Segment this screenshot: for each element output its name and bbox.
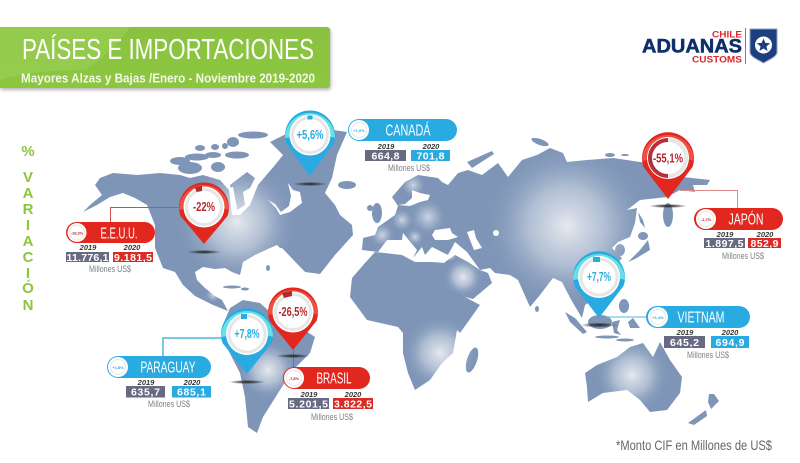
side label: % variación: N (23, 297, 33, 314)
pin: EE.UU. -22%: -22% (193, 200, 215, 214)
panel: Vietnam: VIETNAM (678, 310, 724, 326)
icon: shield (750, 29, 777, 63)
pin shadows (187, 182, 687, 384)
panel: Brasil: Millones US$ (311, 412, 353, 422)
pin: Vietnam +7,7%: +7,7% (587, 270, 611, 284)
panel: E.E.U.U.: -18,3% (71, 230, 84, 236)
panel: E.E.U.U.: E.E.U.U. (100, 226, 138, 242)
panel: Japón (694, 208, 783, 261)
panel: Vietnam: 2020 (721, 328, 739, 337)
panel: Canadá: 2020 (422, 142, 440, 151)
panel: Japón: 2019 (716, 230, 734, 239)
panel: E.E.U.U.: 2020 (123, 243, 141, 252)
pin: Brasil -26,5%: -26,5% (278, 305, 308, 319)
panel: Paraguay: 685,1 (177, 386, 206, 398)
connector lines (110, 190, 738, 367)
panel: Canadá (348, 119, 457, 173)
panel: Brasil: -7,8% (289, 376, 300, 381)
panel: Paraguay: 2020 (183, 378, 201, 387)
pin: Brasil -26,5% (268, 287, 318, 350)
pin: Paraguay +7,8% (221, 308, 273, 374)
panel: Paraguay (107, 356, 211, 409)
panel: Brasil: BRASIL (316, 370, 352, 388)
header banner (0, 27, 331, 90)
side label: % variación: R (23, 201, 34, 218)
panel: Brasil: 2020 (344, 390, 362, 399)
panel: Paraguay: +1,8% (112, 365, 124, 370)
panel: Japón: 2020 (756, 230, 774, 239)
panel: Brasil (283, 367, 373, 422)
panel: E.E.U.U.: Millones US$ (89, 264, 131, 274)
panel: Brasil: 3.822,5 (334, 398, 372, 410)
side label: % variación: % (21, 143, 35, 160)
logo: Aduanas Chile: CUSTOMS (692, 54, 742, 66)
panel: Vietnam: +1,4% (652, 315, 664, 320)
panel: Canadá: 701,8 (416, 150, 445, 162)
logo: Aduanas Chile: ADUANAS (642, 36, 742, 58)
panel: Canadá: 664,8 (372, 150, 400, 162)
pin: EE.UU. -22% (179, 182, 229, 244)
side label: % variación: I (26, 217, 30, 234)
panel: E.E.U.U.: 9.181,5 (114, 252, 152, 264)
pin: Canadá +5,6%: +5,6% (296, 128, 324, 142)
panel: E.E.U.U.: 2019 (79, 243, 97, 252)
panel: Japón: JAPÓN (728, 212, 764, 228)
panel: Vietnam: 645,2 (670, 337, 699, 349)
side label: % variación: I (26, 265, 30, 282)
panel: Japón: 852,9 (750, 238, 779, 250)
panel: Paraguay: 635,7 (131, 386, 160, 398)
panel: Vietnam (646, 306, 750, 360)
side label: % variación: A (23, 185, 34, 202)
pin: Canadá +5,6% (285, 110, 335, 176)
panel: Canadá: CANADÁ (386, 122, 431, 140)
panel: E.E.U.U.: 11.776,1 (66, 252, 109, 264)
pin: Vietnam +7,7% (573, 251, 625, 318)
title: PAÍSES E IMPORTACIONES (22, 33, 314, 66)
panel: Paraguay: Millones US$ (148, 399, 190, 409)
panel: Japón: Millones US$ (722, 251, 764, 261)
inland seas (229, 183, 499, 274)
panel: Japón: 1.897,5 (706, 238, 744, 250)
pin: Japón -55,1% (642, 132, 694, 199)
panel: E.E.U.U. (66, 222, 155, 274)
panel: Brasil: 5.201,5 (289, 398, 328, 410)
side label: % variación: Ó (22, 279, 34, 297)
panel: Japón: -1,7% (701, 217, 712, 222)
logo: Aduanas Chile: CHILE (712, 30, 742, 40)
panel: Paraguay: 2019 (137, 378, 155, 387)
panel: Brasil: 2019 (300, 390, 318, 399)
panel: Vietnam: Millones US$ (687, 350, 729, 360)
pin: Paraguay +7,8%: +7,8% (234, 327, 260, 341)
side label: % variación (21, 143, 35, 314)
panel: Paraguay: PARAGUAY (140, 360, 196, 376)
pin: Japón -55,1%: -55,1% (653, 152, 683, 166)
subtitle: Mayores Alzas y Bajas /Enero - Noviembre 2019-2020 (21, 70, 315, 86)
panel: Vietnam: 694,9 (716, 337, 745, 349)
panel: Canadá: +1,6% (353, 128, 365, 133)
panel: Canadá: 2019 (377, 142, 395, 151)
side label: % variación: V (23, 169, 33, 186)
panel: Canadá: Millones US$ (388, 163, 430, 173)
panel: Vietnam: 2019 (676, 328, 694, 337)
side label: % variación: A (23, 233, 34, 250)
side label: % variación: C (23, 249, 34, 266)
world map (83, 130, 719, 433)
logo: Aduanas Chile (642, 28, 777, 66)
